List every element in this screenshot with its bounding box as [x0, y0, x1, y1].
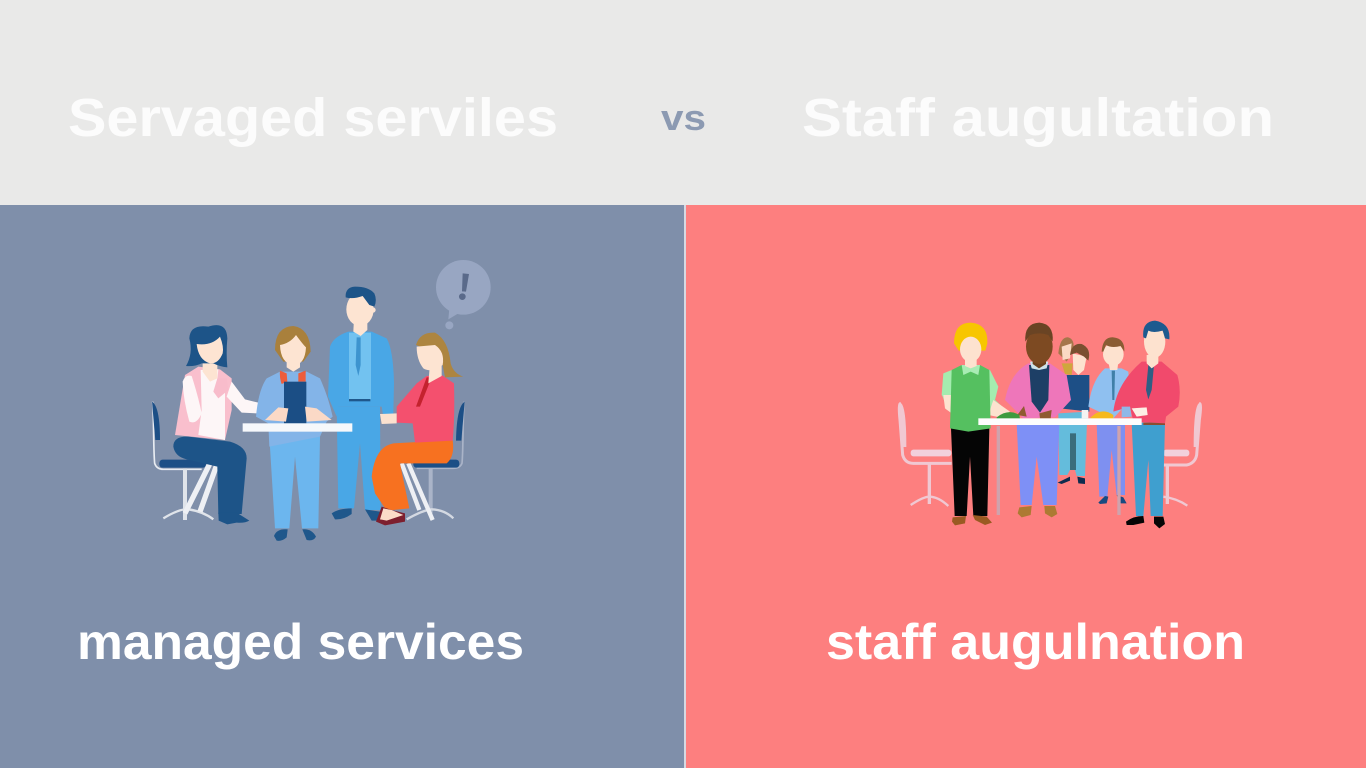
table: [243, 423, 352, 432]
label: managed services: managed services: [77, 614, 524, 670]
heading: vs: vs: [661, 97, 706, 138]
icon: speech bubble with exclamation mark: [436, 260, 491, 329]
figure: man in red shirt: [1113, 321, 1180, 528]
panel: header band: [0, 0, 1366, 205]
heading: right title: Staff augultation: [802, 88, 1274, 148]
table with food: [978, 410, 1142, 515]
figure: background person with child: [1058, 337, 1089, 484]
figure: woman with tablet: [256, 326, 333, 541]
panel: managed services: [0, 205, 684, 768]
illustration: staff augmentation team: [899, 321, 1200, 528]
panel: staff augmentation: [686, 205, 1366, 768]
figure: left chair: [152, 402, 217, 520]
figure: woman in green vest: [942, 323, 1010, 525]
figure: left chair: [899, 403, 952, 506]
figure: man in light blue shirt: [1088, 337, 1130, 504]
illustration: managed services team: [152, 260, 491, 541]
figure: right chair: [402, 402, 465, 520]
figure: woman in red jacket: [372, 333, 463, 525]
figure: man in blue suit: [328, 287, 394, 521]
figure: woman in pink vest: [173, 325, 258, 524]
figure: man in pink blazer: [1005, 323, 1071, 517]
figure: right chair: [1163, 403, 1200, 506]
label: staff augulnation: staff augulnation: [826, 614, 1245, 670]
heading: left title: Servaged serviles: [68, 88, 558, 148]
